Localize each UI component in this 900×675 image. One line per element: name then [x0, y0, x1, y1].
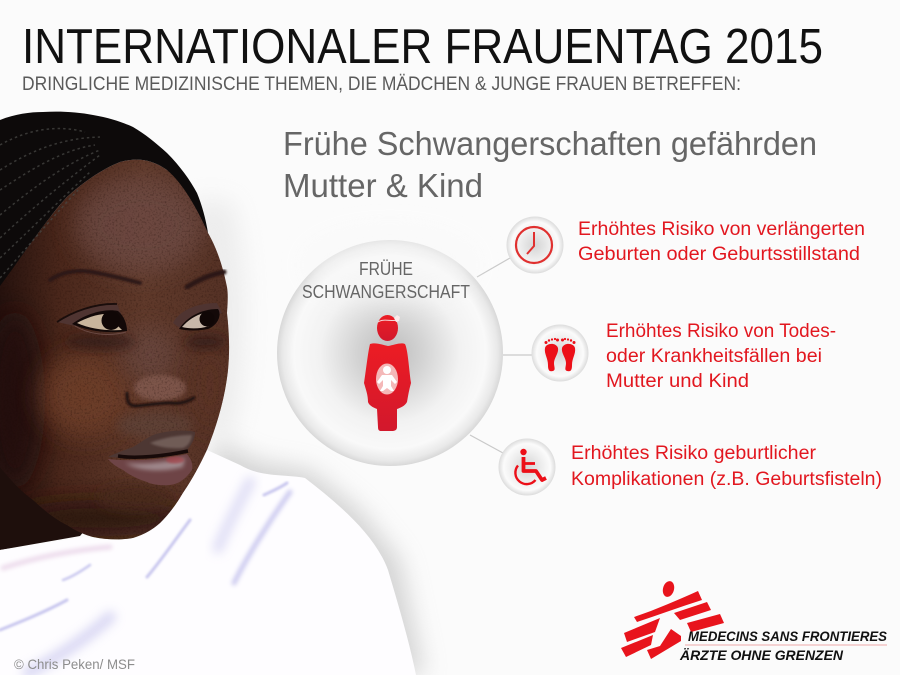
logo: Médecins Sans Frontières [621, 580, 888, 663]
callout: birth complications [571, 443, 882, 490]
icon: pregnant woman [364, 315, 411, 431]
callout: birth complications: Komplikationen (z.B. Geburtsfisteln) [571, 469, 882, 490]
bubble label: FRÜHE [359, 259, 413, 279]
logo text [679, 628, 888, 663]
callout: prolonged labour: Geburten oder Geburtsstillstand [578, 244, 860, 265]
bubble label: SCHWANGERSCHAFT [302, 282, 470, 302]
subtitle: DRINGLICHE MEDIZINISCHE THEMEN, DIE MÄDCHEN & JUNGE FRAUEN BETREFFEN: [22, 74, 741, 95]
heading: Mutter & Kind [283, 167, 483, 204]
bubble: feet [532, 324, 588, 382]
callout: death or illness: Erhöhtes Risiko von Todes- [606, 321, 836, 342]
callout: death or illness: Mutter und Kind [606, 371, 749, 392]
left eye [57, 304, 127, 334]
icon: wheelchair [515, 449, 546, 484]
eyebrows [50, 271, 224, 287]
icon: clock [516, 227, 552, 263]
callout: death or illness [606, 321, 836, 392]
lips [108, 431, 195, 485]
nose [127, 392, 195, 406]
icon: baby [377, 366, 397, 391]
face [0, 160, 230, 540]
callout: death or illness: oder Krankheitsfällen bei [606, 346, 822, 367]
connector lines [470, 258, 533, 453]
neck [0, 455, 85, 550]
callout: prolonged labour [578, 219, 865, 265]
heading [283, 125, 817, 204]
right eye [173, 303, 222, 330]
callout: prolonged labour: Erhöhtes Risiko von verlängerten [578, 219, 865, 240]
icon: footprints [544, 338, 576, 371]
callout: birth complications: Erhöhtes Risiko geburtlicher [571, 443, 817, 464]
bubble label [302, 259, 470, 302]
title: INTERNATIONALER FRAUENTAG 2015 [22, 20, 823, 74]
hair [0, 112, 208, 286]
bubble: wheelchair [498, 438, 556, 496]
central bubble: early pregnancy [277, 230, 503, 466]
bubble: clock [506, 216, 564, 274]
logo text: MEDECINS SANS FRONTIERES [688, 628, 888, 644]
white garment [0, 450, 416, 675]
logo text: ÄRZTE OHNE GRENZEN [679, 647, 844, 663]
photo credit: © Chris Peken/ MSF [14, 656, 135, 672]
photo: portrait of a young woman [0, 112, 416, 675]
heading: Frühe Schwangerschaften gefährden [283, 125, 817, 162]
icon: running figure [621, 580, 724, 659]
